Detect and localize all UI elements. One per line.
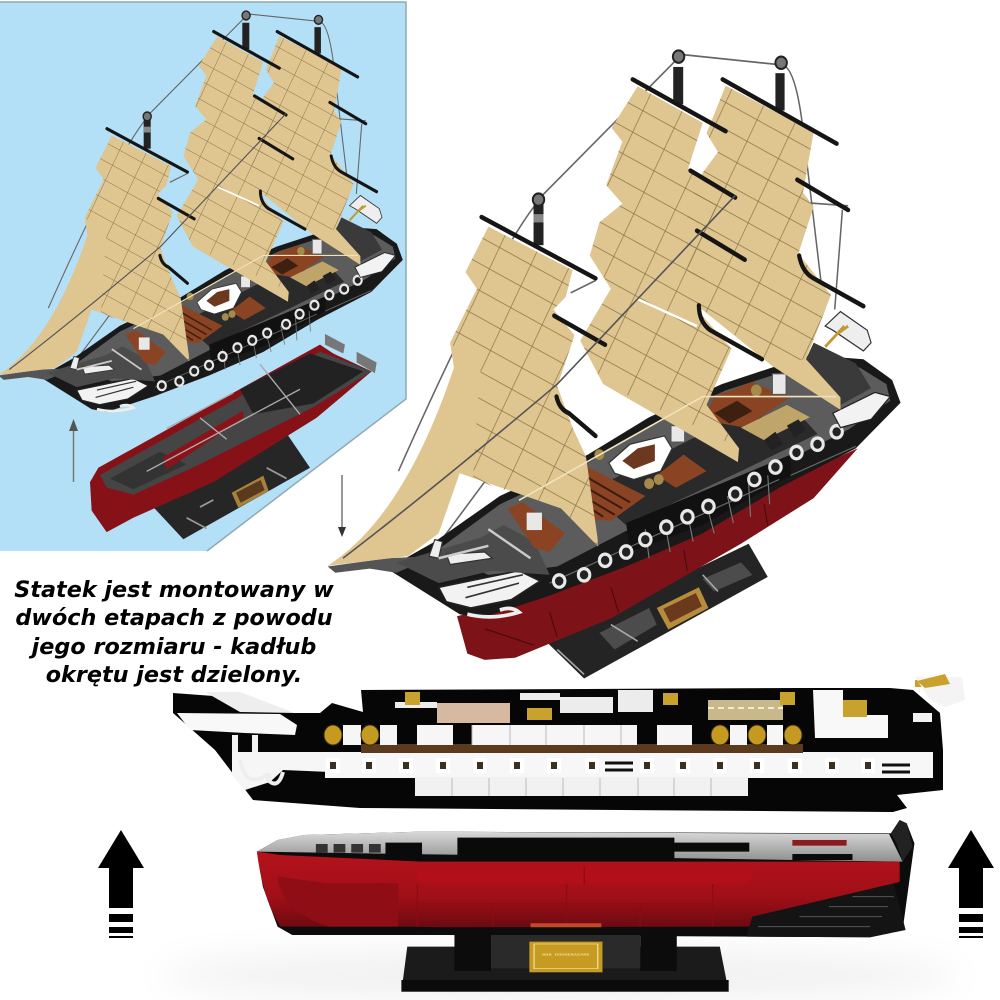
yards bbox=[481, 79, 863, 436]
sails bbox=[328, 86, 840, 566]
large assembled ship bbox=[328, 50, 901, 678]
white mast bases bbox=[671, 374, 786, 442]
bow with white details bbox=[328, 502, 565, 617]
text block: caption: okrętu jest dzielony. bbox=[46, 662, 302, 688]
text block: caption: dwóch etapach z powodu bbox=[15, 605, 333, 631]
forestays over the sails bbox=[343, 195, 837, 558]
white ship's boat bbox=[609, 436, 672, 479]
black hull bbox=[387, 355, 901, 618]
wooden decks bbox=[565, 382, 810, 521]
black stripes bbox=[605, 763, 910, 772]
text block: caption: Statek jest montowany w bbox=[14, 577, 334, 603]
rigging ropes bbox=[398, 55, 848, 554]
stern with white details bbox=[806, 312, 890, 428]
soft floor shadow bbox=[160, 953, 960, 997]
mizzen mast sail bbox=[687, 86, 840, 410]
display stand bbox=[401, 932, 729, 992]
mainmast sail bbox=[580, 86, 739, 462]
text block: caption bbox=[14, 577, 334, 688]
lower photo: upper hull section side view bbox=[173, 674, 965, 812]
lower photo: lower hull section side view bbox=[257, 820, 914, 992]
gold discs bbox=[324, 725, 802, 745]
text block: caption: jego rozmiaru - kadłub bbox=[29, 634, 316, 660]
gold nameplate bbox=[529, 942, 602, 972]
gold nameplate: BNB DOONEBAZARE bbox=[542, 954, 590, 957]
inset: small up arrow bbox=[69, 419, 78, 482]
arrow: left up bbox=[98, 830, 144, 938]
panel: blue instruction inset bbox=[0, 2, 406, 551]
sail seam grid bbox=[450, 86, 831, 547]
small down arrow bbox=[338, 475, 346, 537]
masts bbox=[533, 50, 787, 245]
gun port rings bbox=[553, 426, 842, 587]
lower hull body bbox=[257, 820, 914, 937]
gun ports bbox=[328, 760, 873, 771]
upper ship: hull, decks, rigging and sails bbox=[328, 50, 901, 618]
display base bbox=[546, 544, 768, 678]
red lower hull bbox=[457, 448, 858, 660]
foremast sail bbox=[328, 227, 598, 566]
inset: lower hull section bbox=[90, 334, 377, 539]
arrow: right up bbox=[948, 830, 994, 938]
inset: upper ship section bbox=[0, 11, 403, 412]
